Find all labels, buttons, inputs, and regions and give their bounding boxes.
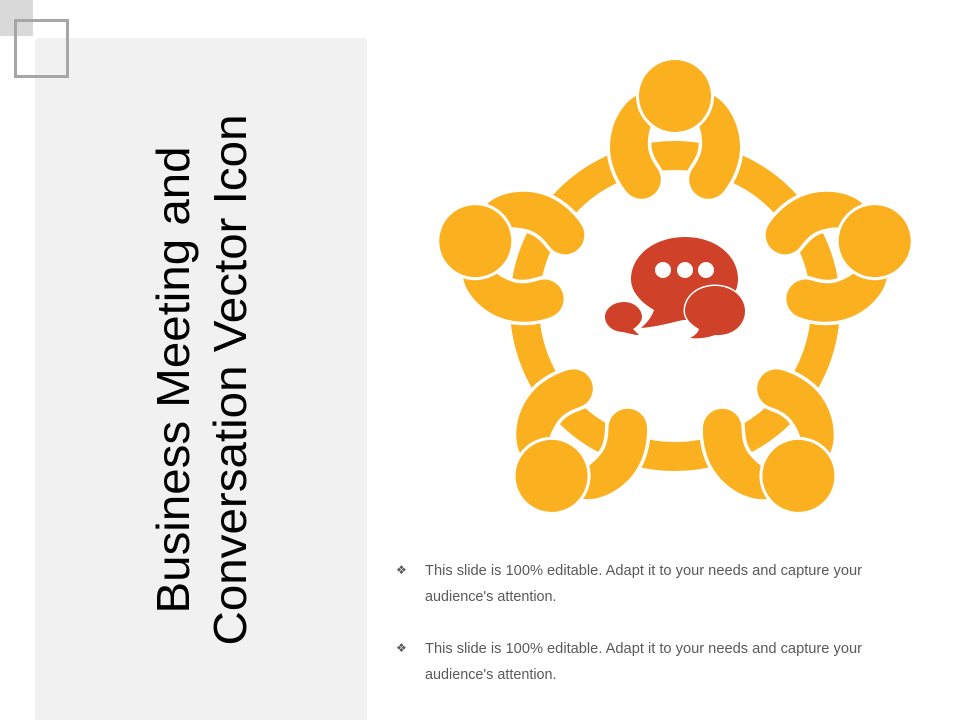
table ring bbox=[524, 156, 826, 456]
person: left bbox=[418, 167, 593, 335]
bullet 2 bbox=[396, 641, 862, 683]
person: right bbox=[757, 167, 932, 335]
bullet 1: ❖ bbox=[396, 563, 407, 577]
bullet 1 bbox=[396, 563, 862, 605]
title: Conversation Vector Icon bbox=[204, 114, 256, 646]
bullet 2: This slide is 100% editable. Adapt it to your needs and capture your bbox=[425, 641, 862, 657]
bullet 1: This slide is 100% editable. Adapt it to your needs and capture your bbox=[425, 563, 862, 579]
side panel bbox=[35, 38, 367, 720]
corner square bbox=[0, 0, 33, 36]
small bubble bbox=[605, 302, 642, 335]
person: bottom left bbox=[476, 355, 665, 546]
speech bubbles icon bbox=[605, 237, 745, 338]
title: Business Meeting and bbox=[147, 147, 199, 613]
person: bottom right bbox=[685, 355, 874, 546]
dots bbox=[655, 262, 671, 278]
bullet 2: audience's attention. bbox=[425, 667, 557, 683]
person: top bbox=[610, 57, 740, 199]
title bbox=[147, 114, 256, 646]
meeting table icon bbox=[418, 57, 932, 546]
front bubble bbox=[685, 286, 745, 338]
bullet list bbox=[396, 563, 862, 683]
bullet 1: audience's attention. bbox=[425, 589, 557, 605]
bullet 2: ❖ bbox=[396, 641, 407, 655]
corner outline frame bbox=[16, 20, 68, 76]
large bubble bbox=[631, 237, 738, 328]
